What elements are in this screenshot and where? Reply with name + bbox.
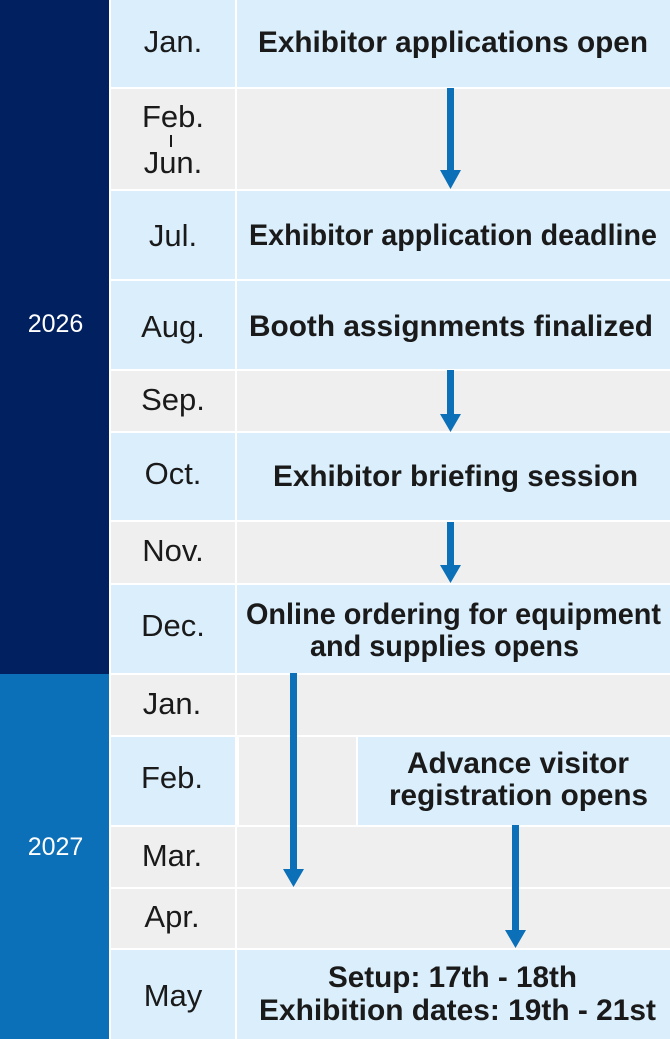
row: May 2027: Setup: 17th - 18th: [328, 961, 577, 994]
row: July 2026: [111, 191, 670, 279]
row: February 2027: registration opens: [389, 779, 648, 812]
row: October 2026: Exhibitor briefing session: [273, 460, 638, 493]
panel: year 2026: [0, 0, 109, 674]
row: February 2027: Feb.: [141, 760, 203, 795]
row: April 2027: Apr.: [144, 899, 200, 934]
row: September 2026: [111, 371, 670, 431]
row: January 2027: [111, 675, 670, 735]
row: July 2026: Exhibitor application deadline: [249, 219, 657, 252]
row: February 2027: [111, 737, 670, 825]
row: February 2027: Advance visitor: [407, 747, 629, 780]
arrow: visitor registration: [505, 825, 526, 948]
arrow: November 2026: [440, 522, 461, 583]
row: December 2026: Dec.: [141, 608, 205, 643]
row: May 2027: Exhibition dates: 19th - 21st: [259, 994, 656, 1027]
row: August 2026: [111, 281, 670, 369]
row: May 2027: [111, 950, 670, 1039]
row: January 2026: [111, 0, 670, 87]
row: December 2026: [111, 585, 670, 673]
row: September 2026: Sep.: [141, 382, 205, 417]
row: February to June 2026: Feb.: [142, 99, 204, 134]
panel: year 2027: [0, 674, 109, 1039]
row: May 2027: May: [144, 978, 203, 1013]
arrow: online ordering: [283, 673, 304, 887]
row: January 2026: Exhibitor applications open: [258, 26, 648, 59]
row: March 2027: [111, 827, 670, 887]
row: December 2026: and supplies opens: [310, 630, 579, 663]
panel: year 2027: 2027: [28, 833, 83, 861]
row: January 2027: Jan.: [143, 686, 201, 721]
row: January 2026: Jan.: [144, 24, 202, 59]
row: December 2026: Online ordering for equipment: [246, 598, 661, 631]
arrow: September 2026: [440, 370, 461, 432]
row: February to June 2026: [111, 89, 670, 189]
row: October 2026: Oct.: [145, 456, 201, 491]
row: February to June 2026: Jun.: [144, 145, 202, 180]
row: March 2027: Mar.: [142, 838, 202, 873]
panel: year 2026: 2026: [28, 310, 83, 338]
row: April 2027: [111, 889, 670, 948]
row: August 2026: Booth assignments finalized: [249, 310, 653, 343]
row: October 2026: [111, 433, 670, 520]
row: July 2026: Jul.: [149, 218, 197, 253]
row: November 2026: Nov.: [142, 533, 204, 568]
row: November 2026: [111, 522, 670, 583]
row: August 2026: Aug.: [141, 309, 205, 344]
arrow: January to July 2026: [440, 88, 461, 189]
